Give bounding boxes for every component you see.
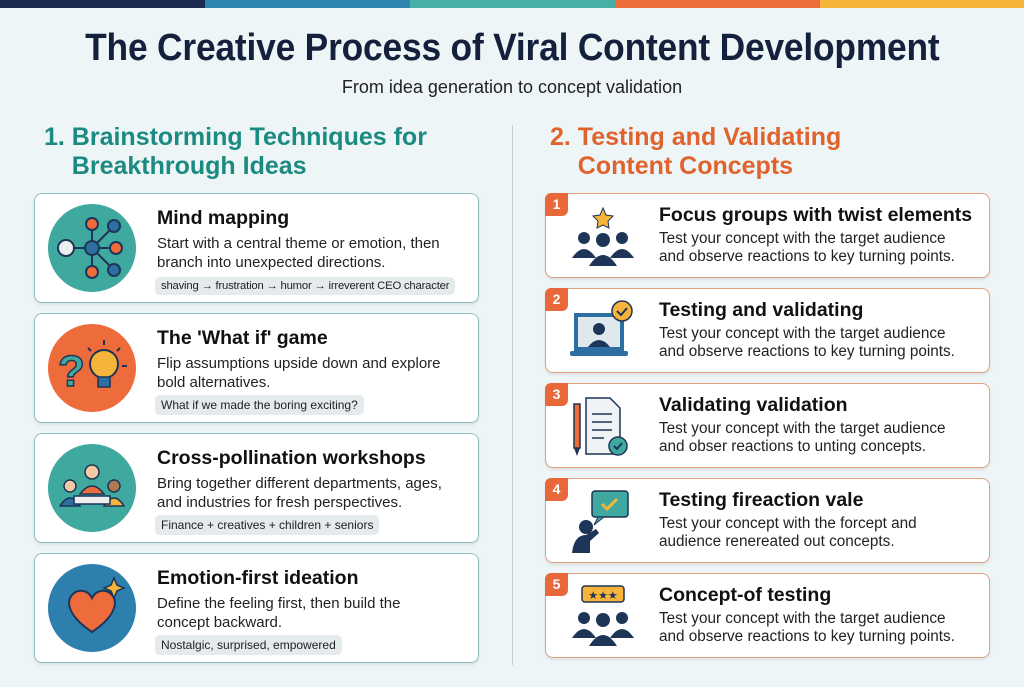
panel: cross-pollination: Bring together different departments, ages, and industries for fresh perspectives. — [157, 475, 442, 511]
title: The Creative Process of Viral Content Development — [85, 27, 939, 69]
heading: section 1 — [44, 123, 427, 180]
panel: step 2 — [545, 288, 990, 373]
panel: emotion-first — [34, 553, 479, 663]
panel: what if — [34, 313, 479, 423]
heading: section 2: 2. Testing and Validating — [550, 123, 841, 151]
panel: step 2: Test your concept with the target audience — [659, 325, 946, 342]
panel: step 5: 5 — [553, 576, 560, 592]
icon: workshop people — [48, 444, 136, 532]
panel: step 3: Validating validation — [659, 394, 848, 416]
panel: step 4: Testing fireaction vale — [659, 489, 863, 511]
heading: section 2: Content Concepts — [578, 152, 793, 180]
icon: mind map — [48, 204, 136, 292]
panel: emotion-first: Emotion-first ideation — [157, 567, 358, 589]
panel: mind mapping — [34, 193, 479, 303]
icon: group with rating — [572, 585, 634, 646]
icon: heart — [48, 564, 136, 652]
icon: person with speech check — [572, 490, 629, 553]
heading: section 2 — [550, 123, 841, 180]
panel: step 3: and obser reactions to unting concepts. — [659, 438, 926, 455]
heading: section 1: 1. Brainstorming Techniques for — [44, 123, 427, 151]
panel: step 1 — [545, 193, 990, 278]
panel: step 5: Concept-of testing — [659, 584, 831, 606]
panel: step 5: and observe reactions to key turning points. — [659, 628, 955, 645]
panel: cross-pollination — [34, 433, 479, 543]
panel: step 5 — [545, 573, 990, 658]
panel: cross-pollination: Finance + creatives + children + seniors — [161, 518, 373, 532]
panel: step 4 — [545, 478, 990, 563]
panel: step 2: 2 — [553, 291, 560, 307]
panel: step 2: and observe reactions to key turning points. — [659, 343, 955, 360]
panel: step 4: 4 — [553, 481, 560, 497]
panel: what if: The 'What if' game — [157, 327, 328, 349]
subtitle: From idea generation to concept validation — [342, 77, 682, 97]
icon: question and bulb — [48, 324, 136, 412]
heading: section 1: Breakthrough Ideas — [72, 152, 307, 180]
icon: laptop with check — [570, 300, 633, 356]
panel: what if: Flip assumptions upside down and explore bold alternatives. — [157, 355, 440, 391]
panel: step 2: Testing and validating — [659, 299, 863, 321]
panel: what if: What if we made the boring exciting? — [161, 398, 358, 412]
panel: step 4: Test your concept with the forcept and — [659, 515, 917, 532]
panel: step 1: 1 — [553, 196, 560, 212]
icon: question and bulb: ? — [58, 347, 85, 396]
top color bar — [0, 0, 1024, 8]
panel: step 3: Test your concept with the target audience — [659, 420, 946, 437]
panel: step 4: audience renereated out concepts. — [659, 533, 895, 550]
panel: step 1: Focus groups with twist elements — [659, 204, 972, 226]
panel: cross-pollination: Cross-pollination workshops — [157, 447, 426, 469]
panel: mind mapping: Start with a central theme or emotion, then branch into unexpected directions. — [157, 235, 440, 271]
panel: emotion-first: Define the feeling first, then build the concept backward. — [157, 595, 400, 631]
panel: mind mapping: shaving → frustration → humor → irreverent CEO character — [161, 280, 449, 292]
panel: emotion-first: Nostalgic, surprised, empowered — [161, 638, 336, 652]
panel: step 3 — [545, 383, 990, 468]
panel: step 1: Test your concept with the target audience — [659, 230, 946, 247]
icon: group with rating: ★★★ — [588, 589, 618, 602]
panel: step 3: 3 — [553, 386, 560, 402]
panel: mind mapping: Mind mapping — [157, 207, 289, 229]
panel: step 5: Test your concept with the target audience — [659, 610, 946, 627]
icon: document and pencil — [573, 397, 628, 456]
panel: step 1: and observe reactions to key turning points. — [659, 248, 955, 265]
icon: group with star — [572, 206, 634, 266]
